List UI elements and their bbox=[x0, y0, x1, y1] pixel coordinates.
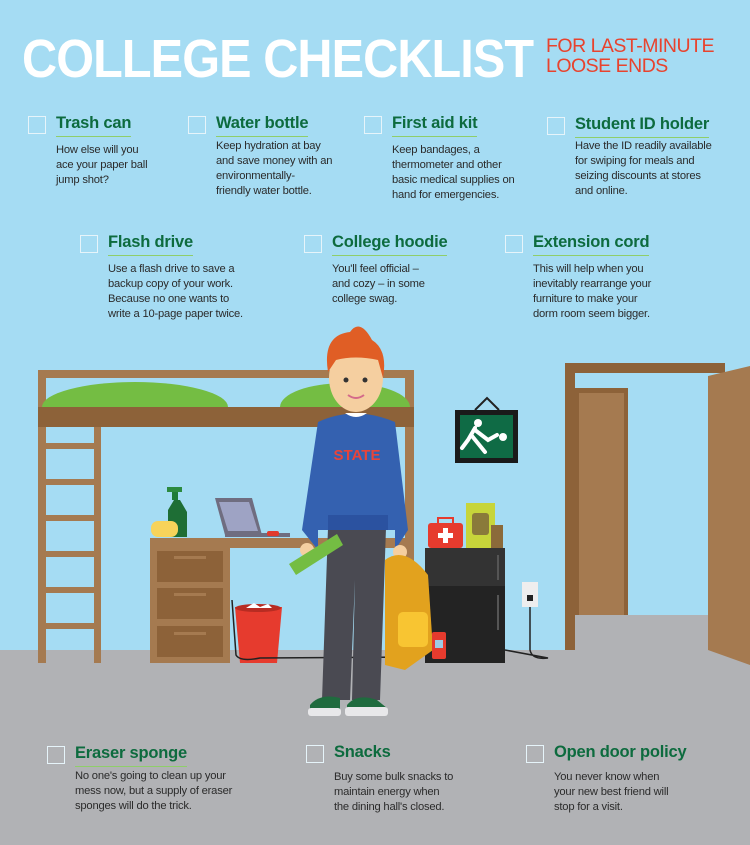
text: Extension cord bbox=[533, 233, 649, 251]
subtitle bbox=[546, 35, 714, 77]
student figure bbox=[289, 327, 446, 716]
subtitle: FOR LAST-MINUTE bbox=[546, 35, 714, 57]
text: dorm room seem bigger. bbox=[533, 308, 650, 320]
item: eraser sponge bbox=[47, 744, 232, 812]
item: student ID holder bbox=[547, 115, 712, 197]
text: backup copy of your work. bbox=[108, 278, 233, 290]
text: the dining hall's closed. bbox=[334, 801, 444, 813]
item: college hoodie bbox=[304, 233, 448, 305]
text: Have the ID readily available bbox=[575, 140, 712, 152]
text: ace your paper ball bbox=[56, 159, 147, 171]
text: environmentally- bbox=[216, 170, 295, 182]
text: First aid kit bbox=[392, 114, 477, 132]
text: Flash drive bbox=[108, 233, 193, 251]
text: Use a flash drive to save a bbox=[108, 263, 234, 275]
text: and save money with an bbox=[216, 155, 332, 167]
text: Eraser sponge bbox=[75, 744, 187, 762]
text: Buy some bulk snacks to bbox=[334, 771, 453, 783]
text: This will help when you bbox=[533, 263, 643, 275]
text: How else will you bbox=[56, 144, 138, 156]
text: Snacks bbox=[334, 743, 391, 761]
spray bottle and sponge bbox=[151, 487, 187, 537]
item: water bottle bbox=[188, 114, 332, 197]
text: for swiping for meals and bbox=[575, 155, 694, 167]
text: jump shot? bbox=[56, 174, 109, 186]
text: Keep hydration at bay bbox=[216, 140, 321, 152]
text: seizing discounts at stores bbox=[575, 170, 701, 182]
snacks bbox=[466, 503, 503, 548]
text: Because no one wants to bbox=[108, 293, 229, 305]
item: snacks bbox=[306, 743, 453, 813]
text: You'll feel official – bbox=[332, 263, 419, 275]
text: Keep bandages, a bbox=[392, 144, 480, 156]
text: No one's going to clean up your bbox=[75, 770, 226, 782]
laptop bbox=[215, 498, 290, 537]
text: mess now, but a supply of eraser bbox=[75, 785, 232, 797]
item: open door policy bbox=[526, 743, 686, 813]
text: inevitably rearrange your bbox=[533, 278, 651, 290]
outlet bbox=[522, 582, 538, 607]
text: and cozy – in some bbox=[332, 278, 425, 290]
text: Water bottle bbox=[216, 114, 308, 132]
text: stop for a visit. bbox=[554, 801, 623, 813]
door bbox=[565, 363, 750, 665]
text: Open door policy bbox=[554, 743, 686, 761]
text: furniture to make your bbox=[533, 293, 637, 305]
subtitle: LOOSE ENDS bbox=[546, 55, 668, 77]
title: COLLEGE CHECKLIST bbox=[22, 29, 533, 89]
text: sponges will do the trick. bbox=[75, 800, 192, 812]
text: College hoodie bbox=[332, 233, 447, 251]
text: write a 10-page paper twice. bbox=[108, 308, 243, 320]
item: extension cord bbox=[505, 233, 652, 320]
text: maintain energy when bbox=[334, 786, 439, 798]
text: basic medical supplies on bbox=[392, 174, 514, 186]
text: hand for emergencies. bbox=[392, 189, 499, 201]
text: and online. bbox=[575, 185, 628, 197]
text: your new best friend will bbox=[554, 786, 668, 798]
picture frame bbox=[455, 398, 518, 463]
text: You never know when bbox=[554, 771, 659, 783]
text: Student ID holder bbox=[575, 115, 709, 133]
floor bbox=[0, 615, 750, 845]
item: trash can bbox=[28, 114, 147, 186]
item: flash drive bbox=[80, 233, 243, 320]
cables bbox=[232, 600, 548, 659]
bunk bed bbox=[38, 370, 414, 663]
text: college swag. bbox=[332, 293, 397, 305]
text: friendly water bottle. bbox=[216, 185, 312, 197]
fridge bbox=[425, 548, 505, 663]
first aid kit bbox=[428, 518, 463, 548]
desk bbox=[150, 538, 405, 663]
student figure: STATE bbox=[334, 447, 380, 464]
text: Trash can bbox=[56, 114, 131, 132]
trash bucket bbox=[235, 603, 282, 663]
item: first aid kit bbox=[364, 114, 514, 201]
text: thermometer and other bbox=[392, 159, 502, 171]
